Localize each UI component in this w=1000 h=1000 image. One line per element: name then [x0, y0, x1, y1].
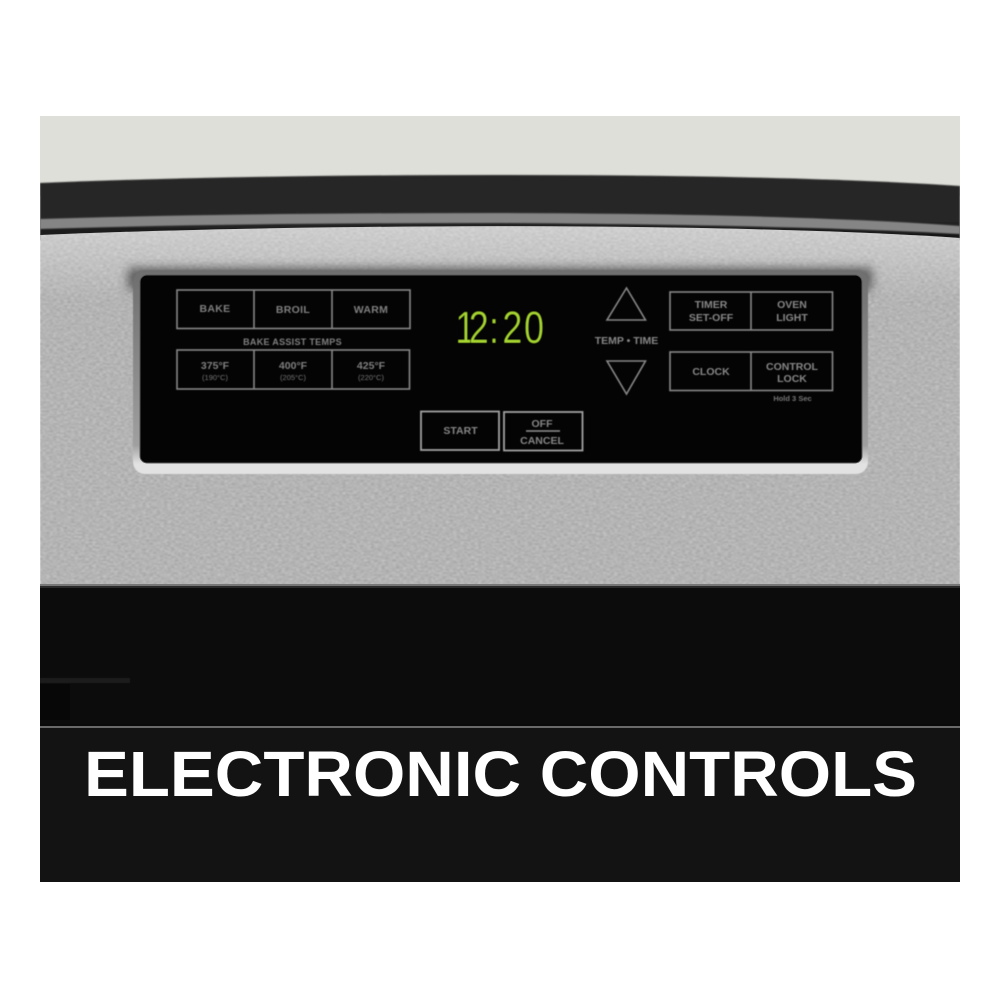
grey trim strip [40, 213, 960, 234]
start and off/cancel buttons [421, 412, 582, 450]
button group: timer and light: OVEN [777, 299, 807, 311]
button group: bake assist temps: 425°F [357, 360, 386, 372]
control panel [133, 270, 868, 474]
button group: timer and light [670, 292, 832, 330]
button group: clock and control lock: CONTROL [766, 361, 819, 373]
off / cancel button [504, 412, 582, 450]
temp and time arrows: TEMP • TIME [595, 335, 658, 347]
label: bake assist temps: BAKE ASSIST TEMPS [243, 337, 342, 347]
button group: bake assist temps: (220°C) [358, 373, 384, 382]
button group: timer and light: LIGHT [776, 312, 808, 324]
button group: bake assist temps: (205°C) [280, 373, 306, 382]
infographic: oven control panel photo with caption [40, 116, 960, 882]
off / cancel button: CANCEL [520, 435, 564, 447]
button group: timer and light: TIMER [695, 299, 728, 311]
button group: bake assist temps: (190°C) [202, 373, 228, 382]
temp and time arrows [595, 288, 658, 394]
button group: clock and control lock: LOCK [777, 373, 807, 385]
panel bezel [133, 270, 868, 474]
title: ELECTRONIC CONTROLS [84, 738, 917, 810]
off / cancel button: OFF [532, 418, 553, 430]
start button [421, 412, 499, 450]
backsplash wall [40, 116, 960, 196]
clock display: 12:20 [455, 302, 544, 353]
icon: up arrow [607, 288, 646, 320]
oven photo [40, 116, 960, 882]
button group: bake assist temps: 375°F [201, 360, 230, 372]
lower black oven door [40, 584, 960, 882]
stainless steel fascia [40, 226, 960, 586]
button group: cook modes [177, 290, 410, 328]
button group: bake assist temps: 400°F [279, 360, 308, 372]
button group: timer and light: SET-OFF [689, 312, 734, 324]
panel glass [140, 275, 862, 463]
button group: cook modes: BROIL [276, 304, 310, 316]
button group: clock and control lock: CLOCK [692, 366, 730, 378]
dark top trim band [40, 175, 960, 240]
button group: cook modes: WARM [354, 304, 388, 316]
button group: bake assist temps [177, 350, 410, 389]
icon: down arrow [607, 361, 646, 394]
button group: cook modes: BAKE [200, 303, 230, 315]
start button: START [443, 425, 478, 437]
button group: clock and control lock: Hold 3 Sec [773, 394, 812, 403]
button group: clock and control lock [670, 352, 832, 403]
